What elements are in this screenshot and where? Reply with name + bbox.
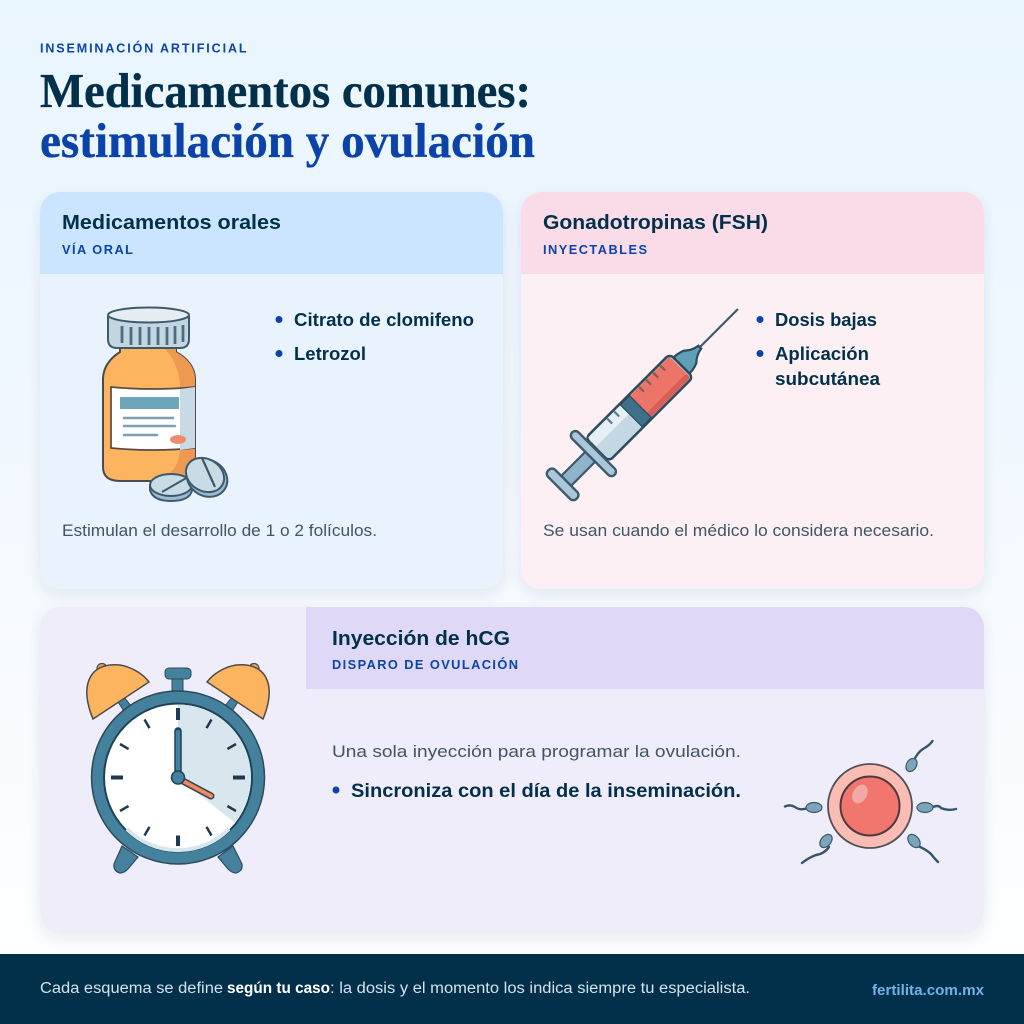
eyebrow: INSEMINACIÓN ARTIFICIAL bbox=[40, 40, 247, 56]
bullets: gonadotropinas: Aplicación bbox=[775, 344, 869, 364]
title: Medicamentos comunes: bbox=[40, 63, 531, 118]
heading: inyección de hCG: Inyección de hCG bbox=[332, 627, 510, 650]
heading: medicamentos orales: Medicamentos orales bbox=[62, 211, 281, 234]
bullets: gonadotropinas bbox=[756, 310, 881, 389]
icon: alarm clock bbox=[87, 664, 269, 873]
footer note: : la dosis y el momento los indica siempre tu especialista. bbox=[330, 980, 750, 997]
subheading: vía oral: VÍA ORAL bbox=[62, 242, 133, 257]
bullets: orales: Letrozol bbox=[294, 344, 366, 364]
footer note bbox=[40, 980, 750, 997]
heading: gonadotropinas: Gonadotropinas (FSH) bbox=[543, 211, 768, 234]
footer note: Cada esquema se define bbox=[40, 980, 223, 997]
bullets: orales: Citrato de clomifeno bbox=[294, 310, 474, 330]
header: inyección de hCG bbox=[306, 607, 984, 689]
icon: egg and sperm bbox=[785, 741, 956, 863]
icon: pill bottle bbox=[103, 308, 234, 504]
panel: inyección de hCG bbox=[40, 607, 984, 933]
subheading: inyectables: INYECTABLES bbox=[543, 242, 647, 257]
title bbox=[40, 63, 535, 168]
header: gonadotropinas bbox=[521, 192, 984, 274]
footer bar bbox=[0, 954, 1024, 1024]
bullets: orales bbox=[276, 310, 474, 364]
bullets: gonadotropinas: subcutánea bbox=[775, 369, 881, 389]
footer note: según tu caso bbox=[227, 980, 330, 997]
title: estimulación y ovulación bbox=[40, 113, 535, 168]
text: hCG description: Una sola inyección para programar la ovulación. bbox=[332, 742, 741, 761]
panel: gonadotropinas bbox=[521, 192, 984, 589]
subheading: disparo de ovulación: DISPARO DE OVULACIÓN bbox=[332, 657, 518, 672]
text: gonadotropinas description: Se usan cuando el médico lo considera necesario. bbox=[543, 521, 934, 540]
text: orales description: Estimulan el desarrollo de 1 o 2 folículos. bbox=[62, 521, 377, 540]
footer url: fertilita.com.mx bbox=[872, 982, 985, 999]
bullet: hCG: Sincroniza con el día de la inseminación. bbox=[351, 781, 741, 802]
panel: medicamentos orales bbox=[40, 192, 503, 589]
header: medicamentos orales bbox=[40, 192, 503, 274]
icon: syringe bbox=[538, 288, 759, 509]
bullets: gonadotropinas: Dosis bajas bbox=[775, 310, 877, 330]
